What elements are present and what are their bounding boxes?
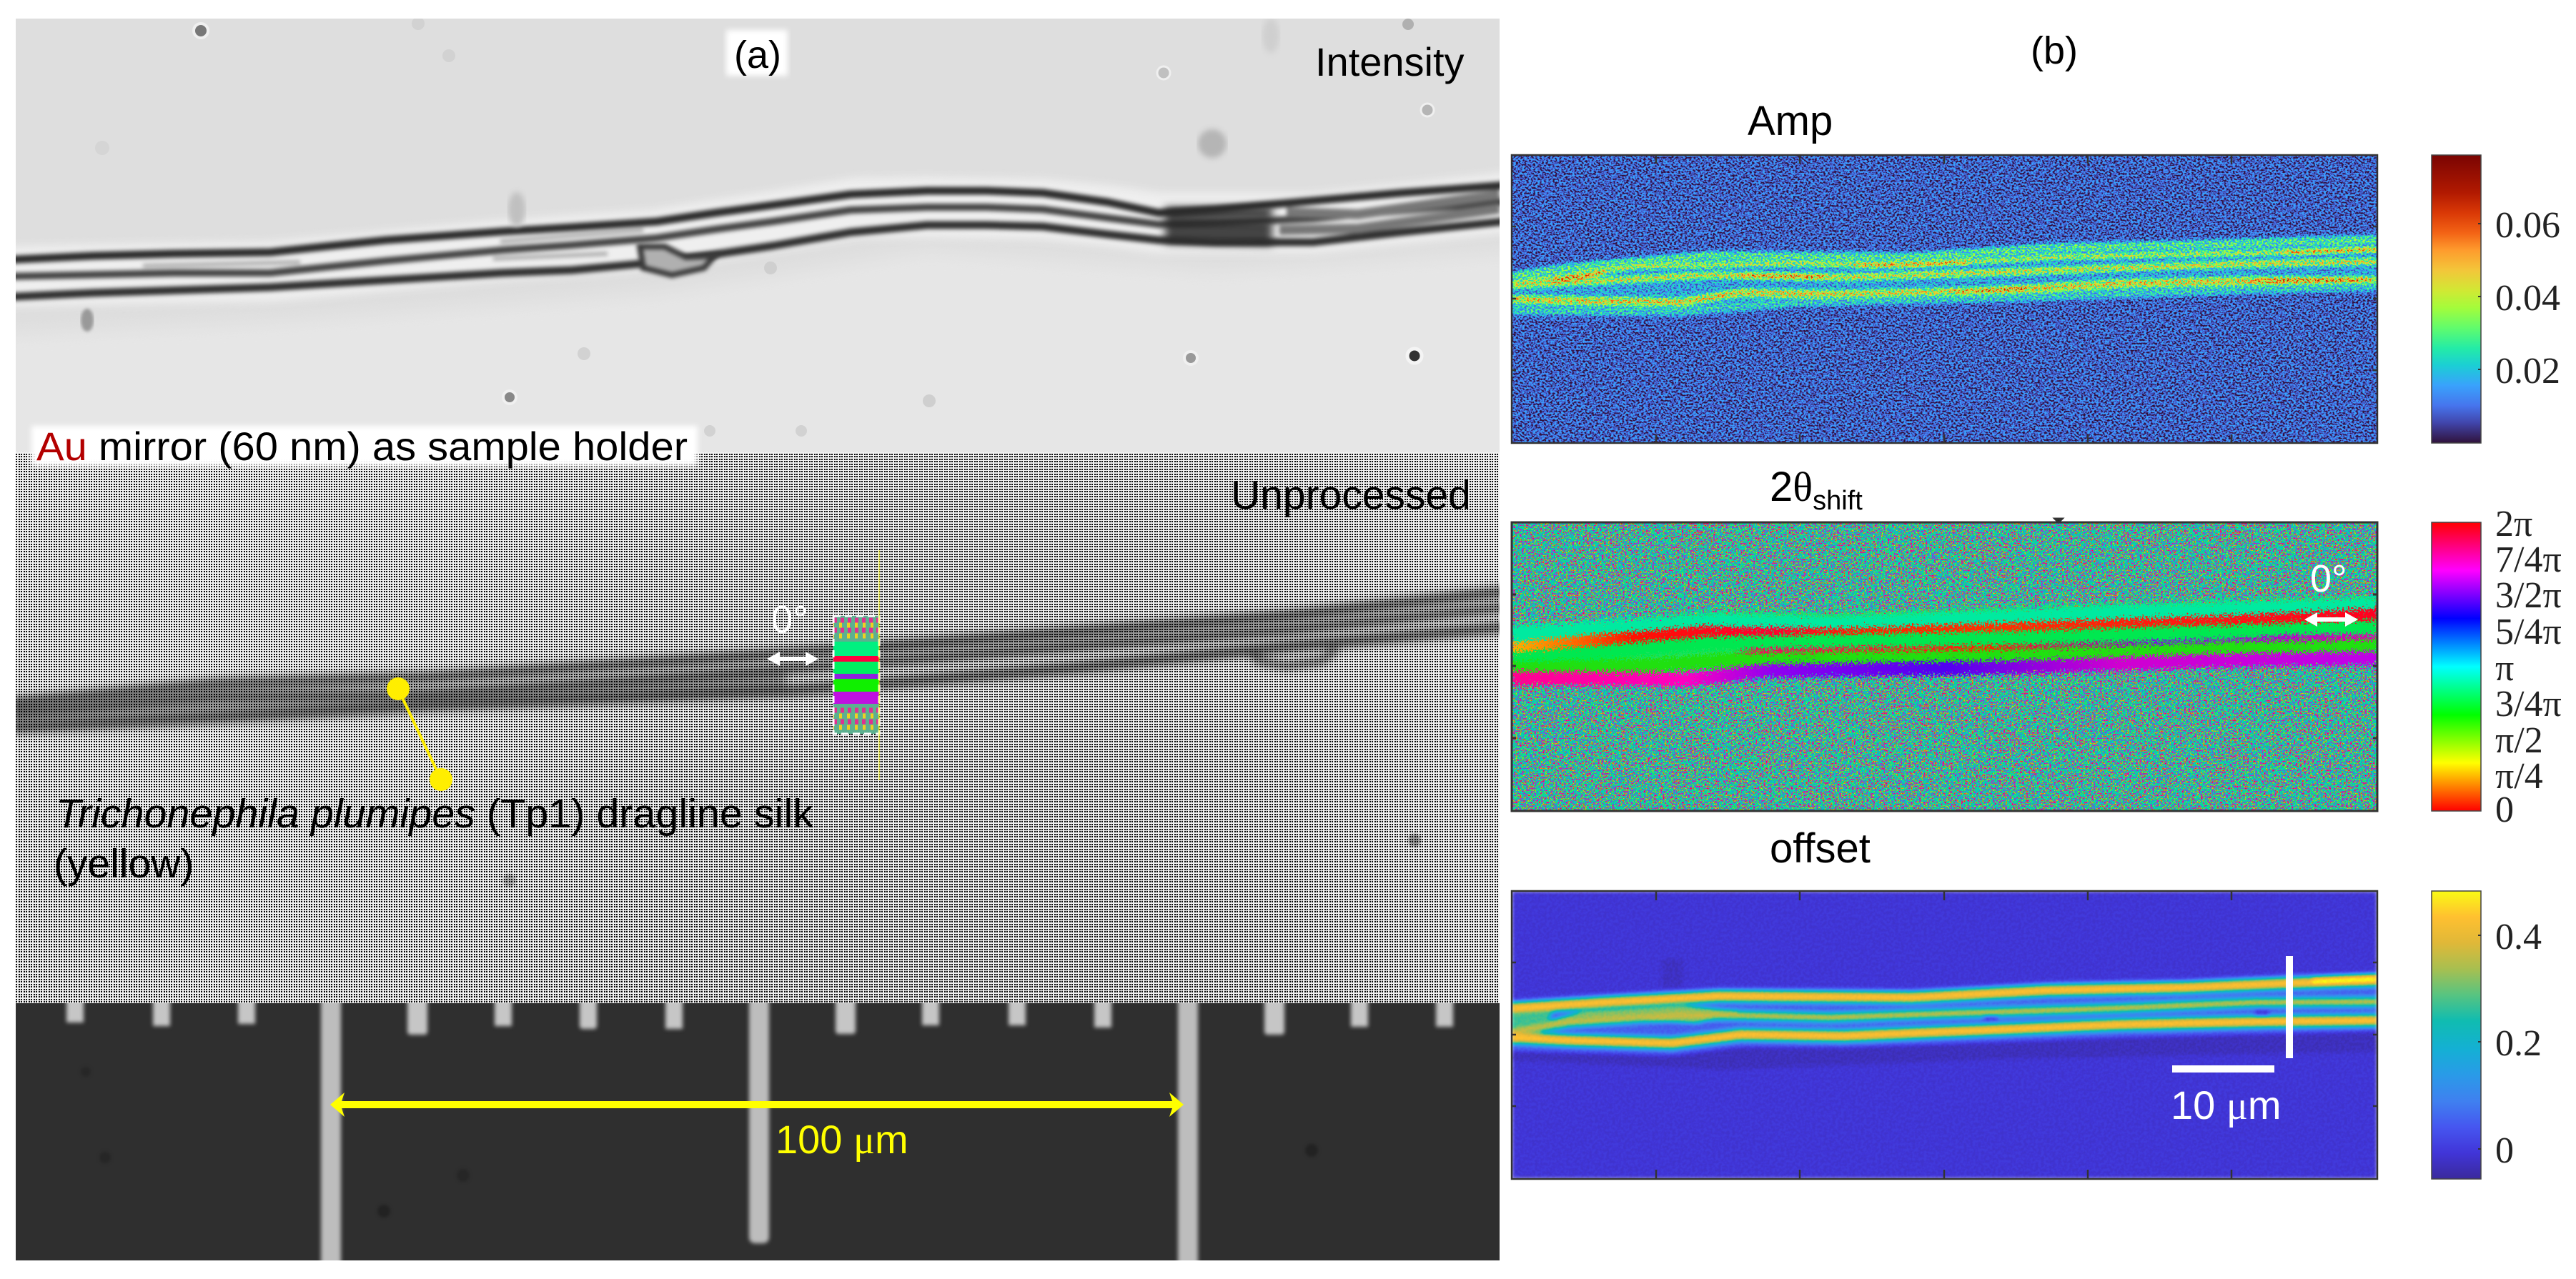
grating dust spots — [81, 1067, 1318, 1218]
panel: offset heatmap — [1512, 825, 2542, 1179]
debris blob on strand — [640, 247, 715, 275]
phase bands — [1512, 597, 2377, 680]
label: silk species — [54, 791, 813, 887]
phase colorbar: 5/4π — [2495, 612, 2562, 652]
panel: Amp heatmap — [1512, 98, 2560, 443]
heading: 2θ shift: shift — [1813, 486, 1863, 516]
label: silk species: Trichonephila plumipes (Tp1) dragline silk — [56, 791, 813, 837]
phase colorbar: 3/4π — [2495, 684, 2562, 725]
particles on mirror — [81, 17, 1434, 437]
offset colorbar: 0 — [2495, 1130, 2514, 1171]
label: silk species: (yellow) — [54, 841, 194, 887]
offset map — [1512, 891, 2377, 1179]
annotation: 0 degree polarisation in image: 0° — [771, 598, 808, 641]
phase colorbar: 7/4π — [2495, 539, 2562, 580]
heading: Amp: Amp — [1748, 98, 1833, 144]
offset colorbar: 0.4 — [2495, 917, 2542, 957]
scale bars — [2172, 956, 2293, 1073]
panel: Intensity micrograph — [16, 19, 1500, 452]
phase colorbar: 0 — [2495, 790, 2514, 830]
phase colorbar: π — [2495, 648, 2514, 689]
annotation: 0 degree polarisation: 0° — [2310, 557, 2347, 600]
annotation: 0 degree polarisation — [2304, 557, 2358, 627]
Amp colorbar: 0.02 — [2495, 351, 2560, 392]
label: (a): (a) — [734, 34, 781, 76]
silk strands seen through grid — [0, 587, 1544, 730]
panel (a): microscope images — [0, 17, 1544, 1269]
offset colorbar — [2432, 891, 2542, 1179]
Amp colorbar — [2432, 155, 2560, 443]
Amp colorbar: 0.06 — [2495, 205, 2560, 246]
panel: 2θ shift phase map — [1512, 464, 2562, 830]
arrow: 100 µm scale — [330, 1093, 1184, 1117]
phase axis frame and ticks — [1512, 519, 2377, 811]
phase colorbar — [2432, 504, 2562, 830]
label: 10 µm: 10 μm — [2171, 1083, 2282, 1128]
offset colorbar: 0.2 — [2495, 1023, 2542, 1064]
inset: phase map overlay — [833, 550, 879, 780]
dark knot in strand — [1165, 213, 1272, 239]
label: 100 µm: 100 μm — [776, 1117, 908, 1163]
Amp map — [1512, 155, 2377, 443]
Amp axis frame and ticks — [1512, 155, 2377, 443]
panel: Unprocessed grid image — [0, 452, 1544, 1003]
phase colorbar: 2π — [2495, 504, 2532, 544]
silk strand lines — [0, 182, 1544, 299]
phase colorbar: π/4 — [2495, 756, 2543, 797]
Amp colorbar: 0.04 — [2495, 278, 2560, 319]
phase colorbar: 3/2π — [2495, 575, 2562, 616]
marker: yellow silk pointer — [387, 677, 452, 791]
offset axis frame and ticks — [1512, 891, 2377, 1179]
phase noise background — [1512, 522, 2377, 811]
phase colorbar: π/2 — [2495, 720, 2543, 761]
grating long bars — [321, 997, 1198, 1269]
label: Unprocessed: Unprocessed — [1231, 472, 1471, 518]
heading: 2θ shift: 2θ — [1770, 464, 1813, 510]
label: Intensity: Intensity — [1315, 39, 1465, 84]
label: (b): (b) — [2031, 29, 2078, 72]
annotation: 0 degree polarisation in image — [767, 598, 818, 666]
heading: offset: offset — [1770, 825, 1871, 872]
label: Au mirror: Au mirror (60 nm) as sample holder — [36, 424, 688, 469]
grating short ticks — [66, 997, 1453, 1035]
panel: calibration grating — [16, 997, 1500, 1269]
